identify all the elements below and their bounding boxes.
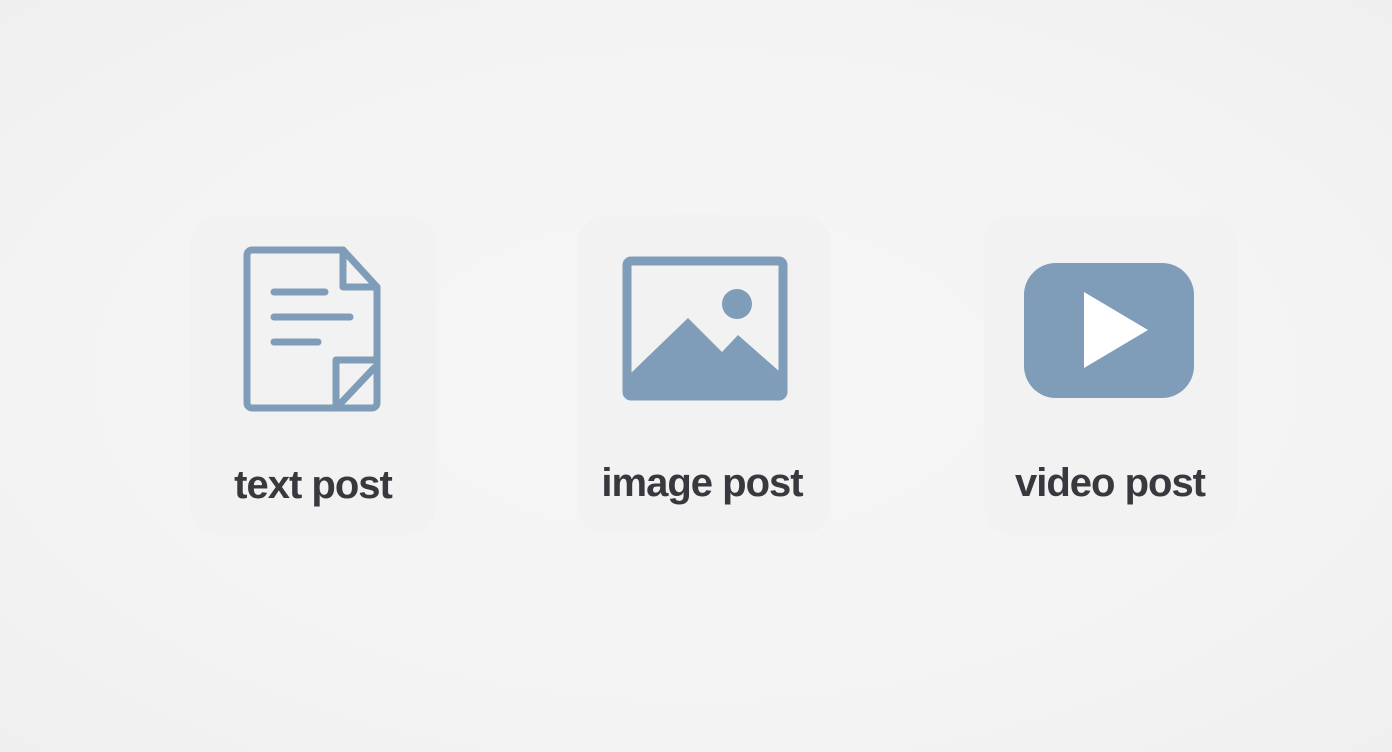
panel: video post bbox=[984, 215, 1238, 535]
label: image post: image post bbox=[601, 461, 803, 505]
label: video post: video post bbox=[1015, 461, 1205, 505]
label: text post: text post bbox=[234, 463, 392, 507]
panel: image post bbox=[578, 215, 830, 535]
panel: text post bbox=[190, 215, 436, 535]
